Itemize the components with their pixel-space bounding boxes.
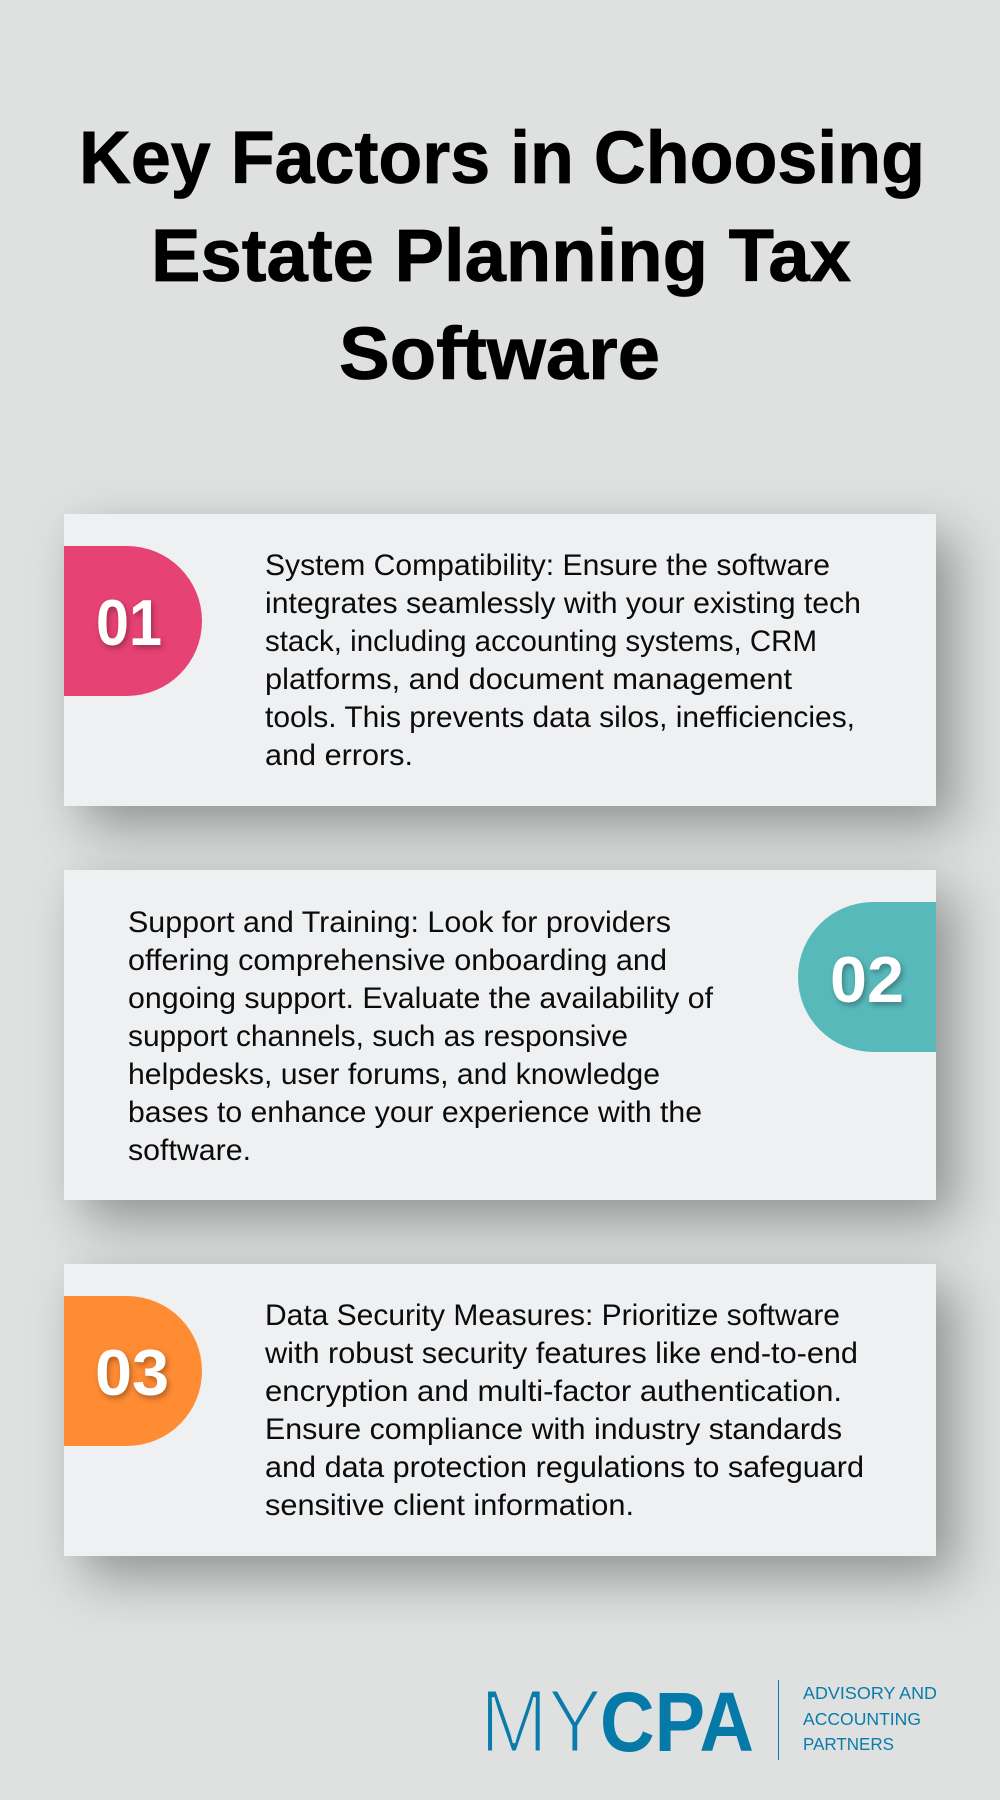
text: support and training: Support and Training: Look for providers (128, 906, 671, 939)
text: data security measures: and data protection regulations to safeguard (265, 1451, 864, 1484)
text: support and training (128, 906, 714, 1167)
text: data security measures: Data Security Measures: Prioritize software (265, 1299, 840, 1332)
logo: MYCPA: MY (480, 1672, 602, 1772)
badge: 02 (798, 902, 936, 1052)
panel: factor 01 system compatibility (64, 514, 936, 806)
logo tagline: ACCOUNTING (803, 1709, 921, 1729)
text: system compatibility: System Compatibility: Ensure the software (265, 549, 830, 582)
title (79, 116, 925, 395)
text: data security measures: Ensure compliance with industry standards (265, 1413, 842, 1446)
title: Key Factors in Choosing (79, 116, 925, 199)
text: system compatibility: and errors. (265, 739, 413, 772)
text: support and training: ongoing support. Evaluate the availability of (128, 982, 714, 1015)
badge: 01: 01 (96, 586, 162, 659)
text: system compatibility: stack, including accounting systems, CRM (265, 625, 817, 658)
text: data security measures: with robust security features like end-to-end (264, 1337, 858, 1370)
logo: MYCPA (480, 1672, 937, 1772)
text: data security measures: encryption and multi-factor authentication. (265, 1375, 842, 1408)
text: system compatibility: tools. This prevents data silos, inefficiencies, (265, 701, 855, 734)
text: support and training: helpdesks, user forums, and knowledge (128, 1058, 660, 1091)
logo: MYCPA: CPA (600, 1675, 754, 1769)
logo tagline: PARTNERS (803, 1734, 894, 1754)
text: system compatibility (265, 549, 861, 772)
title: Estate Planning Tax (151, 214, 851, 297)
text: support and training: offering comprehensive onboarding and (128, 944, 667, 977)
text: support and training: bases to enhance your experience with the (128, 1096, 702, 1129)
logo tagline (803, 1683, 937, 1754)
badge: 03 (64, 1296, 202, 1446)
text: system compatibility: platforms, and document management (265, 663, 792, 696)
title: Software (339, 312, 660, 395)
badge: 03: 03 (95, 1336, 169, 1409)
panel: factor 03 data security measures (64, 1264, 936, 1556)
panel: factor 02 support and training (64, 870, 936, 1200)
text: system compatibility: integrates seamlessly with your existing tech (265, 587, 861, 620)
text: data security measures: sensitive client information. (265, 1489, 634, 1522)
logo tagline: ADVISORY AND (803, 1683, 937, 1703)
text: support and training: software. (128, 1134, 251, 1167)
text: support and training: support channels, such as responsive (128, 1020, 628, 1053)
text: data security measures (264, 1299, 864, 1522)
badge: 01 (64, 546, 202, 696)
badge: 02: 02 (830, 943, 904, 1016)
